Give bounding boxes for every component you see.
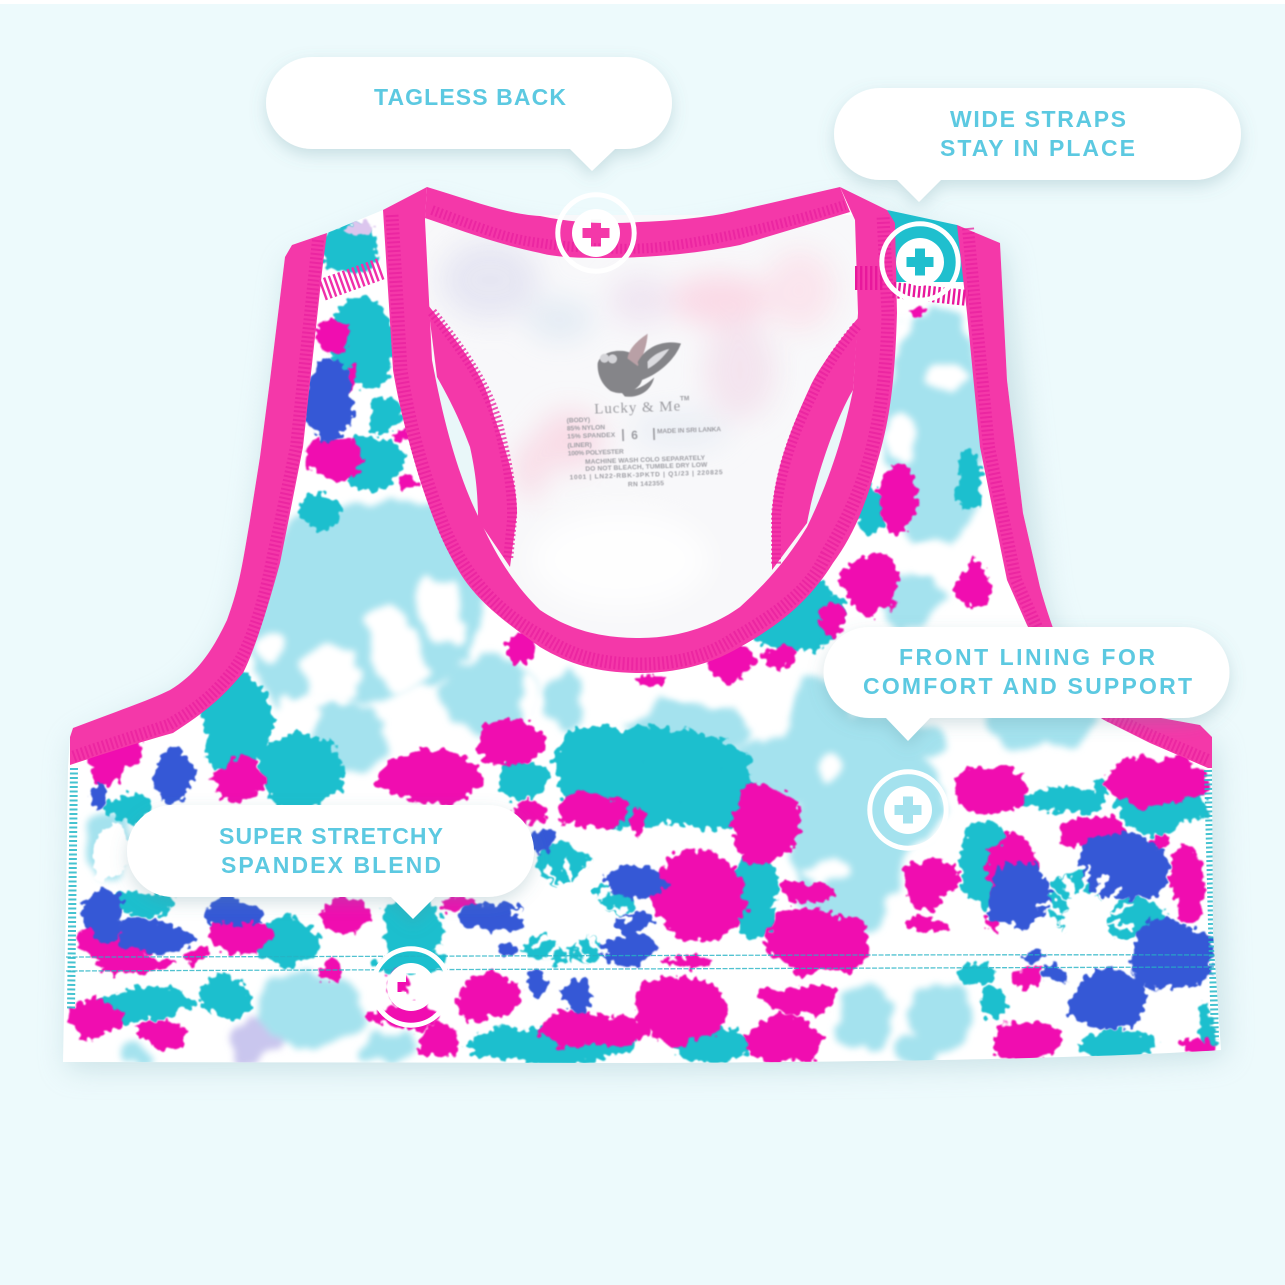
broad white streaks through pale dye <box>260 359 980 880</box>
callout: super stretchy <box>127 805 534 919</box>
icon: fish logo <box>597 333 683 398</box>
teal strap top panel <box>887 208 967 282</box>
callout: wide straps: WIDE STRAPS <box>950 106 1126 132</box>
care text: 15% SPANDEX <box>567 432 616 441</box>
brand name: Lucky & Me <box>594 399 681 418</box>
care text <box>567 412 723 491</box>
care text: (LINER) <box>567 442 592 450</box>
garment: tie-dye racerback sports bra <box>40 170 1240 1070</box>
callout: super stretchy: SUPER STRETCHY <box>219 823 443 849</box>
back lining with pale print <box>427 215 856 518</box>
back neckline binding <box>425 187 850 258</box>
callout: wide straps: STAY IN PLACE <box>940 135 1135 161</box>
spiral centres with star fringes <box>92 221 1123 959</box>
strap cross seams <box>322 268 968 298</box>
care text: MACHINE WASH COLO SEPARATELY <box>585 455 706 466</box>
callout: super stretchy: SPANDEX BLEND <box>221 852 441 878</box>
care text: MADE IN SRI LANKA <box>657 426 721 435</box>
front neckline binding <box>383 187 897 673</box>
care text: RN 142355 <box>628 480 664 488</box>
hotspot: wide straps <box>882 224 958 300</box>
left armhole binding <box>70 233 327 765</box>
care text: 85% NYLON <box>567 424 605 433</box>
garment label: Lucky & Me care tag <box>564 331 723 491</box>
top white edge strip <box>0 0 1285 4</box>
callout: tagless back: TAGLESS BACK <box>374 84 566 110</box>
care text: | <box>652 425 656 441</box>
right racerback band <box>772 318 858 570</box>
care text: DO NOT BLEACH, TUMBLE DRY LOW <box>585 462 708 473</box>
callout: front lining: FRONT LINING FOR <box>899 644 1155 670</box>
hotspot: stretchy spandex <box>373 949 449 1025</box>
care text: 100% POLYESTER <box>568 449 624 458</box>
left racerback band <box>428 305 517 567</box>
callout: wide straps <box>834 88 1241 202</box>
care text: | <box>621 427 625 442</box>
care text: 6 <box>631 428 638 442</box>
garment label: Lucky & Me care tag: TM <box>680 395 689 403</box>
tie-dye fabric body <box>40 170 1240 1070</box>
care text: (BODY) <box>567 417 590 425</box>
right armhole binding <box>957 225 1212 768</box>
care text: 1001 | LN22-RBK-3PKTD | Q1/23 | 220825 <box>570 469 723 481</box>
hem stitching lines <box>66 955 1214 971</box>
callout: tagless back <box>266 57 672 171</box>
racerback opening slits <box>433 370 860 525</box>
garment drop shadow <box>67 207 1225 1070</box>
callout: front lining <box>824 627 1230 741</box>
side seams <box>71 768 1215 1040</box>
overlock stitching on bindings <box>72 205 1208 760</box>
hotspot: tagless back <box>558 195 634 271</box>
callout: front lining: COMFORT AND SUPPORT <box>863 673 1192 699</box>
hotspot: front lining <box>870 772 946 848</box>
